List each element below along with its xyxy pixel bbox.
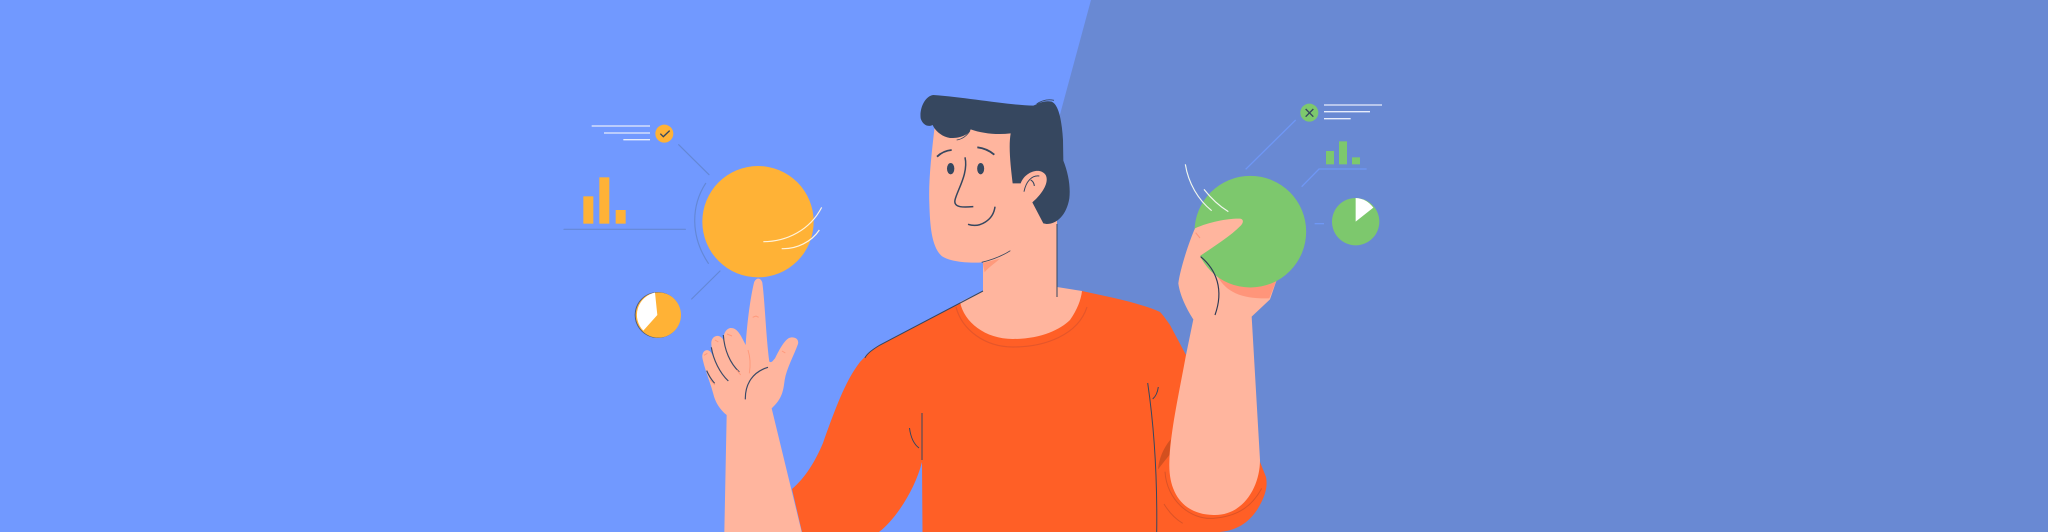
bar chart: yellow [583, 177, 626, 224]
finger lines [707, 335, 768, 399]
right arm and hand [1158, 176, 1306, 523]
yellow pie chart [635, 292, 681, 338]
hand and forearm [702, 279, 802, 532]
shirt fold lines [910, 383, 1158, 532]
shoulder outline [865, 291, 983, 358]
check badge with text lines [592, 125, 673, 143]
yellow ball [702, 166, 822, 277]
cross badge with text lines [1300, 104, 1382, 122]
forearm and palm [1169, 228, 1277, 515]
face [929, 117, 1057, 263]
neck [960, 215, 1082, 339]
connector lines and arc [564, 145, 720, 299]
collar line [956, 307, 1087, 347]
shirt torso and sleeves [792, 290, 1267, 532]
thumb [1192, 219, 1243, 257]
green ball motion lines [1185, 164, 1228, 212]
left option graphics [564, 125, 822, 338]
knuckle marks [704, 316, 785, 385]
smile [968, 207, 995, 225]
green pie chart [1332, 198, 1379, 245]
hair [920, 95, 1070, 224]
ear [1020, 171, 1047, 203]
connector lines [1246, 120, 1367, 224]
bar chart: green [1326, 141, 1360, 164]
green ball [1194, 176, 1306, 287]
jaw line [982, 251, 1010, 262]
palm line [1201, 257, 1219, 315]
chin shadow [983, 259, 1000, 272]
nose [955, 157, 973, 207]
thumb crease [1196, 233, 1200, 238]
head [920, 95, 1070, 272]
right option graphics [1246, 104, 1382, 245]
cuff lines [1164, 472, 1262, 523]
neck back outline [1056, 224, 1058, 297]
eyebrows [937, 147, 994, 157]
left arm and pointing hand [702, 279, 802, 532]
background: right darker panel [947, 0, 2048, 532]
eyes [947, 163, 954, 174]
person [702, 95, 1306, 532]
sleeve shadow [1158, 439, 1171, 469]
palm shadow [1217, 276, 1277, 298]
hair strands [957, 100, 1054, 140]
ear detail [1024, 176, 1039, 192]
